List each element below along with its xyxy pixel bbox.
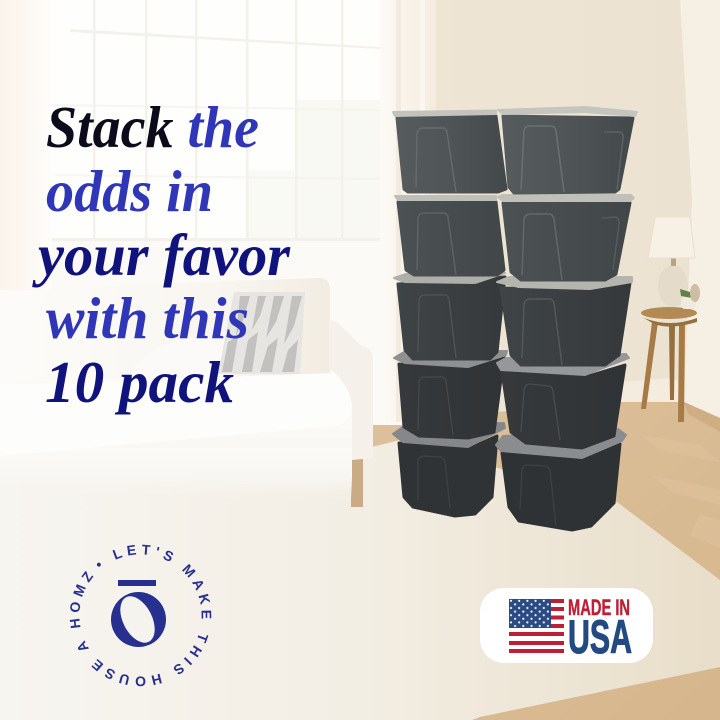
wood skirting: [684, 402, 720, 432]
headline: [32, 94, 291, 415]
side table and lamp: [641, 217, 700, 422]
window wall wash: [0, 0, 436, 425]
pillow: zebra: [218, 292, 305, 374]
headline line 3: your favor: [32, 222, 291, 288]
bin: second left: [395, 196, 504, 275]
storage bins stack: [393, 107, 637, 530]
sofa arm: [329, 321, 373, 460]
bin: top left: [393, 110, 506, 192]
bin: top right: [498, 107, 637, 193]
bin: bottom left: [393, 423, 505, 516]
wood floor: [372, 402, 720, 720]
sofa: [0, 278, 373, 507]
bin: third right: [497, 277, 632, 365]
headline line 2: odds in: [46, 158, 213, 224]
usa flag: [509, 599, 564, 653]
sofa leg: [351, 455, 363, 507]
sofa seat cushion: [0, 373, 352, 456]
background wall: [0, 0, 720, 440]
made in label: MADE IN: [568, 595, 630, 620]
bin: second right: [498, 195, 634, 280]
brand logo: [70, 544, 212, 686]
sofa base: [0, 422, 352, 500]
floor planks: [640, 435, 720, 548]
bin: fourth right: [497, 354, 629, 448]
sofa back: [32, 278, 330, 378]
pillow: white: [128, 338, 240, 376]
rug: [0, 440, 720, 720]
baseboard: [622, 378, 684, 402]
made in usa badge: [480, 588, 653, 663]
headline line 4: with this: [46, 285, 249, 351]
bin: bottom right: [496, 429, 626, 530]
curtains: [0, 0, 436, 422]
right wall: [680, 0, 720, 418]
usa label: USA: [568, 610, 632, 663]
window: [50, 0, 382, 241]
logo bar: [118, 580, 156, 586]
bin: third left: [394, 273, 505, 359]
bin: fourth left: [394, 351, 507, 438]
logo ring: [111, 592, 166, 647]
headline line 5: 10 pack: [45, 349, 235, 415]
logo circular text: • LET'S MAKE THIS HOUSE A HOMZ: [70, 544, 212, 686]
badge background: [480, 588, 653, 663]
sofa left cushion: [0, 290, 34, 387]
headline line 1: Stack the: [46, 94, 259, 160]
